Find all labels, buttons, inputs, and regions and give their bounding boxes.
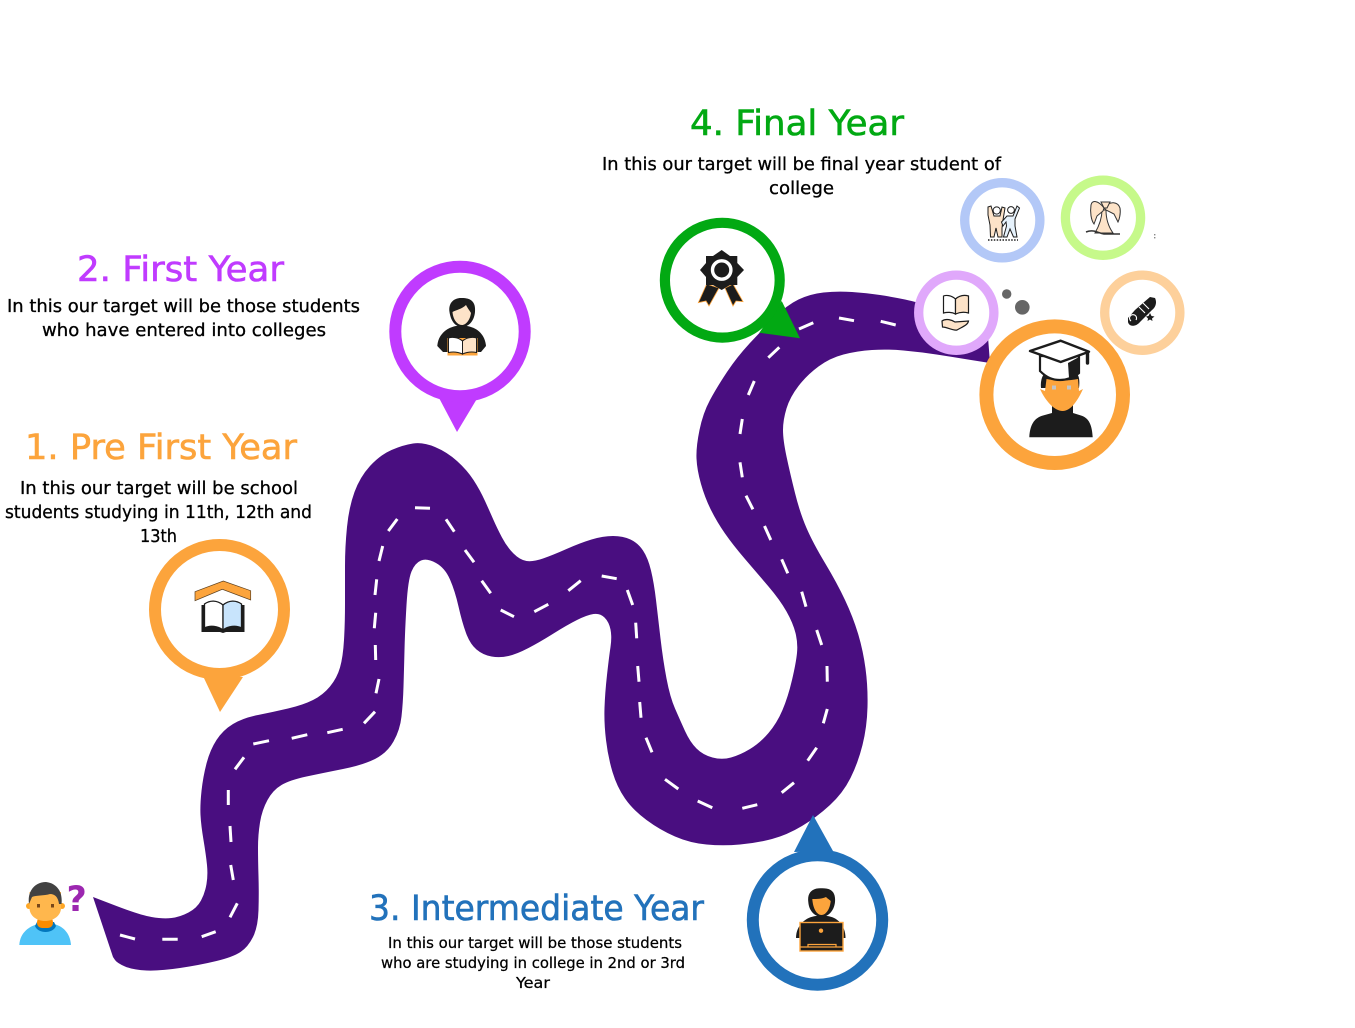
icon: book on hand (942, 295, 968, 330)
winding road (93, 292, 990, 971)
text: intermediate year description: who are studying in college in 2nd or 3rd (381, 954, 685, 972)
text: final year description (602, 155, 1002, 199)
thought circle: campus life (965, 183, 1040, 258)
icon: student reading book (437, 298, 486, 356)
icon: confused student with question mark: ? (66, 880, 87, 920)
heading: 2. First Year: 2. First Year (77, 250, 285, 290)
text: intermediate year description: In this our target will be those students (388, 934, 682, 952)
icon: palm tree (1086, 202, 1120, 234)
heading: 1. Pre First Year: 1. Pre First Year (25, 428, 298, 468)
pin 2: first year (395, 267, 525, 432)
icon: graduate with cap (1029, 341, 1093, 437)
text: first year description (7, 297, 360, 341)
pin 3: intermediate year (753, 815, 882, 985)
heading: 4. Final Year: 4. Final Year (690, 104, 905, 144)
icon: confused student with question mark (19, 880, 87, 945)
graduate circle (986, 326, 1123, 463)
icon: diploma scroll (1128, 297, 1156, 326)
text: pre first year description: In this our target will be school (20, 479, 298, 499)
icon: book with roof (195, 581, 251, 633)
heading: 3. Intermediate Year: 3. Intermediate Year (369, 889, 705, 929)
thought circle: diploma (1105, 275, 1180, 350)
text: final year description: In this our target will be final year student of (602, 155, 1002, 175)
text: pre first year description: students studying in 11th, 12th and (5, 503, 312, 523)
pin 1: pre first year (155, 545, 284, 712)
text: intermediate year description (381, 934, 685, 992)
text: first year description: who have entered into colleges (42, 321, 326, 341)
text: intermediate year description: Year (515, 974, 551, 992)
icon: dancing friends (988, 206, 1020, 240)
text: first year description: In this our target will be those students (7, 297, 360, 317)
text: pre first year description: 13th (140, 527, 177, 547)
icon: award ribbon (698, 250, 744, 306)
pin 4: final year (665, 223, 800, 338)
text: pre first year description (5, 479, 312, 547)
thought circle: studying (919, 275, 994, 350)
thought circle: vacation palm (1065, 180, 1141, 255)
icon: student at laptop (796, 888, 846, 951)
thought bubble dots (1002, 234, 1155, 315)
text: final year description: college (769, 179, 834, 199)
